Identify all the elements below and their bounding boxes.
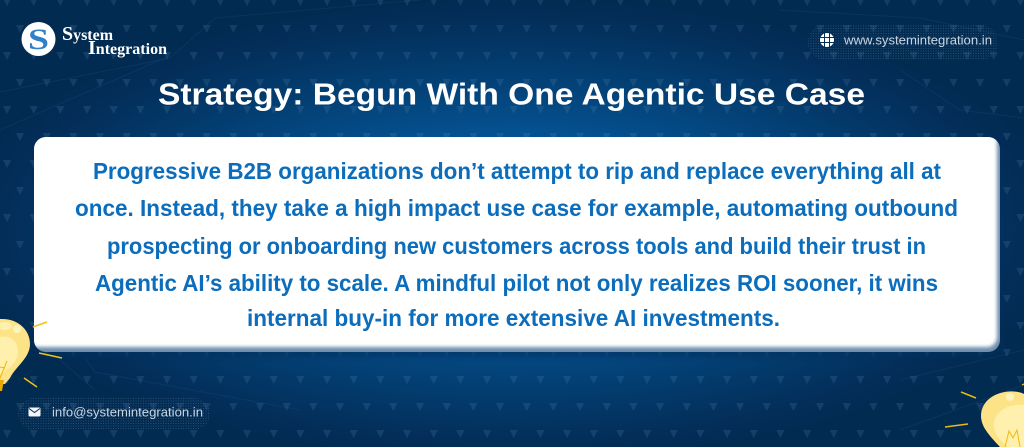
description text <box>75 158 958 331</box>
description text: once. Instead, they take a high impact use case for example, automating outbound <box>75 195 958 221</box>
website url: www.systemintegration.in <box>843 34 992 48</box>
description text: internal buy-in for more extensive AI investments. <box>247 305 780 331</box>
title: Strategy: Begun With One Agentic Use Case <box>158 76 865 112</box>
icon: right light bulb <box>945 384 1024 447</box>
website badge <box>808 25 998 60</box>
icon: envelope <box>28 408 40 416</box>
logo mark: S <box>28 23 49 56</box>
panel: description <box>20 120 1002 357</box>
description text: Progressive B2B organizations don’t attempt to rip and replace everything all at <box>93 158 941 184</box>
description text: prospecting or onboarding new customers across tools and build their trust in <box>107 233 926 259</box>
icon: globe <box>820 33 834 47</box>
email badge <box>18 398 210 430</box>
logo mark <box>22 22 56 56</box>
logo wordmark: Integration <box>88 37 167 59</box>
email address: info@systemintegration.in <box>52 406 203 420</box>
logo wordmark: System <box>62 23 114 45</box>
logo <box>22 22 167 59</box>
logo wordmark <box>62 23 167 59</box>
icon: left light bulb <box>0 319 62 391</box>
description text: Agentic AI’s ability to scale. A mindful pilot not only realizes ROI sooner, it wins <box>95 270 938 296</box>
